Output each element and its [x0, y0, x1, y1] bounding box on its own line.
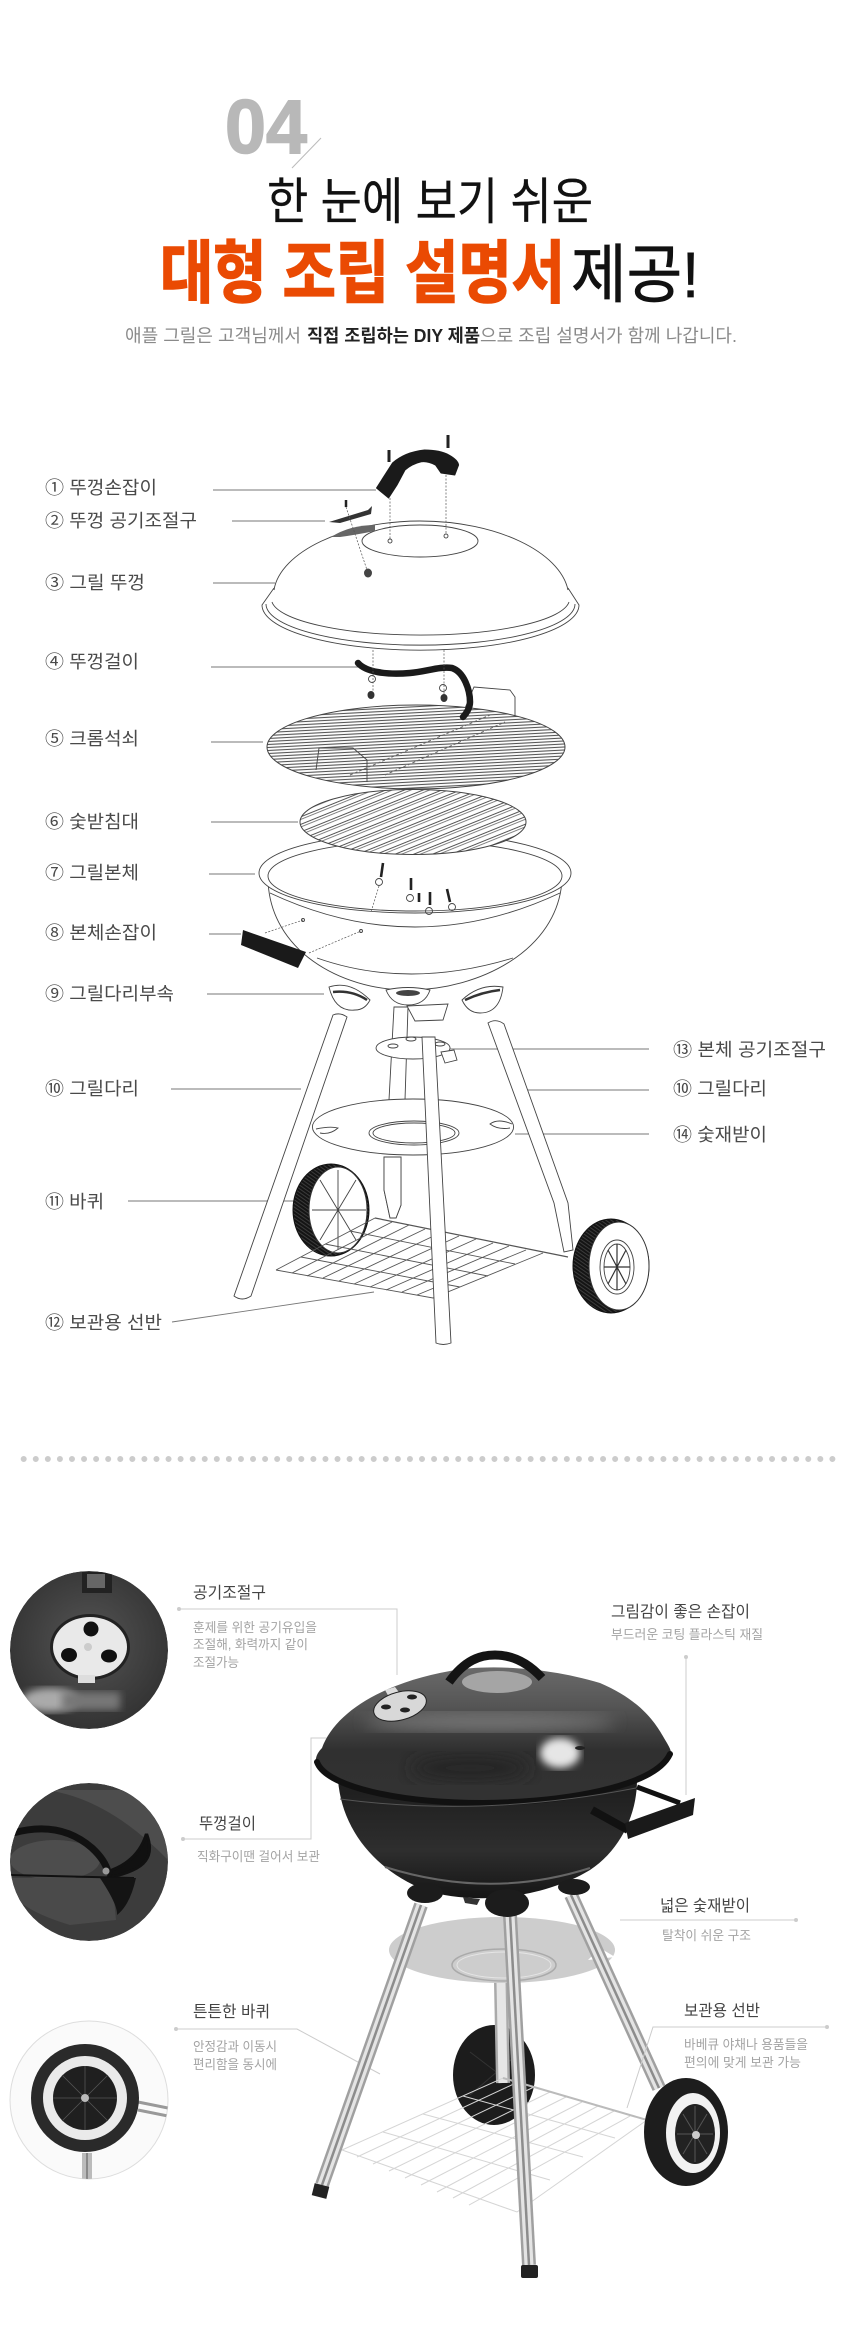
product photo: assembled grill — [310, 1655, 728, 2278]
storage shelf — [342, 2078, 647, 2212]
callout: wheel: 편리함을 동시에 — [193, 2057, 277, 2072]
front leg — [422, 1037, 451, 1344]
section number 04: 04 — [225, 85, 307, 170]
lid top handle — [449, 1655, 542, 1693]
grill body bowl — [259, 833, 571, 990]
callout: lid hanger: 직화구이땐 걸어서 보관 — [197, 1849, 320, 1864]
label 10 right: ⑩ 그릴다리 — [673, 1079, 767, 1099]
subtitle: 직접 조립하는 DIY 제품 — [307, 326, 480, 346]
exploded diagram of the grill — [234, 435, 649, 1344]
callout: air vent: 공기조절구 — [193, 1584, 266, 1602]
lower back leg — [384, 1157, 401, 1218]
right leg — [571, 1895, 659, 2088]
body seam — [340, 1788, 636, 1806]
subtitle: 애플 그릴은 고객님께서 — [125, 326, 301, 346]
subtitle — [125, 326, 737, 346]
label 12 — [45, 1292, 374, 1333]
storage shelf — [276, 1218, 568, 1298]
callout: lid hanger: 뚜껑걸이 — [199, 1815, 256, 1833]
back wheel — [453, 2025, 535, 2125]
callout: handle — [611, 1603, 763, 1795]
label 5: ⑤ 크롬석쇠 — [45, 729, 139, 749]
callout: wheel: 튼튼한 바퀴 — [193, 2003, 270, 2021]
callout: wheel: 안정감과 이동시 — [193, 2039, 277, 2054]
title line 2: 제공! — [571, 239, 699, 311]
lid dome — [316, 1667, 671, 1800]
subtitle: 으로 조립 설명서가 함께 나갑니다. — [480, 326, 737, 346]
lid dome — [262, 521, 579, 650]
front wheel — [644, 2078, 728, 2186]
bowl screws — [371, 863, 456, 914]
label 6: ⑥ 숯받침대 — [45, 812, 139, 832]
bowl reflection — [385, 1867, 590, 1884]
right leg — [488, 1021, 573, 1252]
ash catcher — [312, 1099, 514, 1155]
callout: handle: 부드러운 코팅 플라스틱 재질 — [611, 1627, 763, 1642]
callout: wheel — [174, 2003, 380, 2074]
label 13: ⑬ 본체 공기조절구 — [673, 1040, 826, 1060]
lid rim — [317, 1754, 670, 1803]
label 8: ⑧ 본체손잡이 — [45, 923, 157, 943]
back leg — [384, 1007, 408, 1218]
detail photo: wheel — [10, 2021, 168, 2181]
bottom vent plate — [376, 1037, 457, 1063]
left leg — [319, 1905, 421, 2197]
lid vent — [329, 500, 372, 578]
leg sockets — [407, 1879, 590, 1917]
dotted divider — [24, 1456, 836, 1462]
label 9: ⑨ 그릴다리부속 — [45, 984, 174, 1004]
detail photo: air vent — [10, 1571, 168, 1729]
label 1: ① 뚜껑손잡이 — [45, 478, 157, 498]
title line 2: 대형 조립 설명서 — [160, 236, 565, 312]
body handle — [241, 918, 362, 968]
cooking grate — [267, 687, 565, 789]
lid handle with screws — [376, 435, 459, 540]
callout: lid hanger — [181, 1738, 356, 1864]
callout: air vent: 조절가능 — [193, 1655, 239, 1670]
callout: handle: 그림감이 좋은 손잡이 — [611, 1603, 750, 1621]
leg sockets — [329, 985, 503, 1021]
label 14: ⑭ 숯재받이 — [673, 1125, 767, 1145]
callout: ash catcher: 넓은 숯재받이 — [660, 1897, 750, 1915]
label 2: ② 뚜껑 공기조절구 — [45, 511, 197, 531]
label 11: ⑪ 바퀴 — [45, 1192, 104, 1212]
front leg — [510, 1915, 538, 2278]
title line 1: 한 눈에 보기 쉬운 — [267, 174, 593, 230]
callout: ash catcher — [620, 1897, 798, 1943]
callout: storage shelf: 바베큐 야채나 용품들을 — [684, 2037, 808, 2052]
callout: storage shelf — [627, 2002, 829, 2108]
charcoal grate — [300, 790, 526, 854]
bowl — [338, 1780, 637, 1898]
lid vent — [370, 1685, 430, 1727]
callout: air vent: 조절해, 화력까지 같이 — [193, 1637, 308, 1652]
label 12: ⑫ 보관용 선반 — [45, 1313, 162, 1333]
detail photo: lid hanger — [10, 1783, 168, 1941]
left wheel — [293, 1164, 369, 1256]
callout: storage shelf: 편의에 맞게 보관 가능 — [684, 2055, 801, 2070]
panel: exploded parts labels — [45, 478, 826, 1333]
lid hanger — [358, 650, 470, 717]
label 3: ③ 그릴 뚜껑 — [45, 573, 145, 593]
callout: ash catcher: 탈착이 쉬운 구조 — [662, 1928, 751, 1943]
back leg — [501, 1982, 503, 2083]
callout: air vent: 훈제를 위한 공기유입을 — [193, 1620, 317, 1635]
label 10 left: ⑩ 그릴다리 — [45, 1079, 139, 1099]
ash catcher — [389, 1917, 615, 1983]
callout: air vent — [177, 1584, 397, 1675]
right wheel — [573, 1219, 649, 1313]
left leg — [234, 1014, 347, 1299]
callout: storage shelf: 보관용 선반 — [684, 2002, 760, 2020]
label 4: ④ 뚜껑걸이 — [45, 652, 139, 672]
label 7: ⑦ 그릴본체 — [45, 863, 139, 883]
side handle — [592, 1787, 695, 1839]
